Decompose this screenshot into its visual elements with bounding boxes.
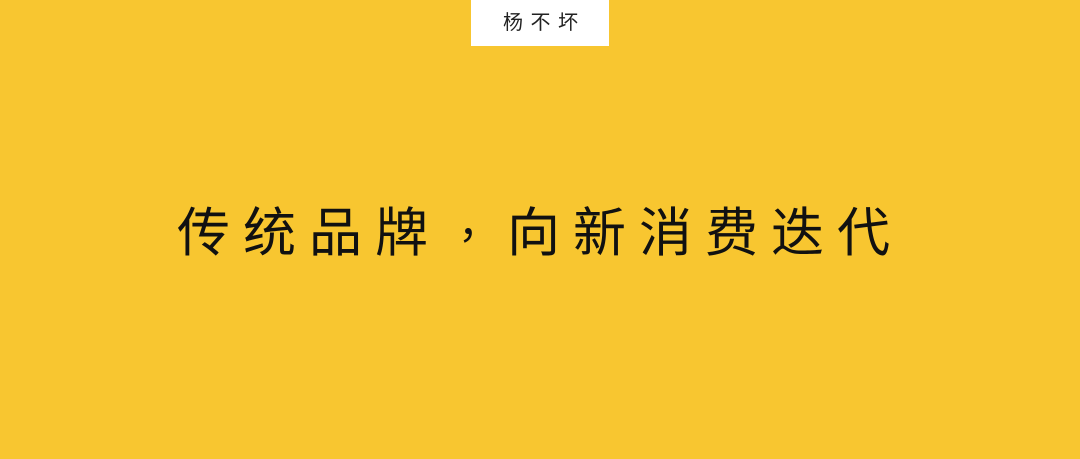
author tag <box>471 0 609 46</box>
title: ， <box>458 200 500 247</box>
title: 传统品牌 向新消费迭代 <box>177 204 903 263</box>
author name: 杨不坏 <box>503 12 586 34</box>
